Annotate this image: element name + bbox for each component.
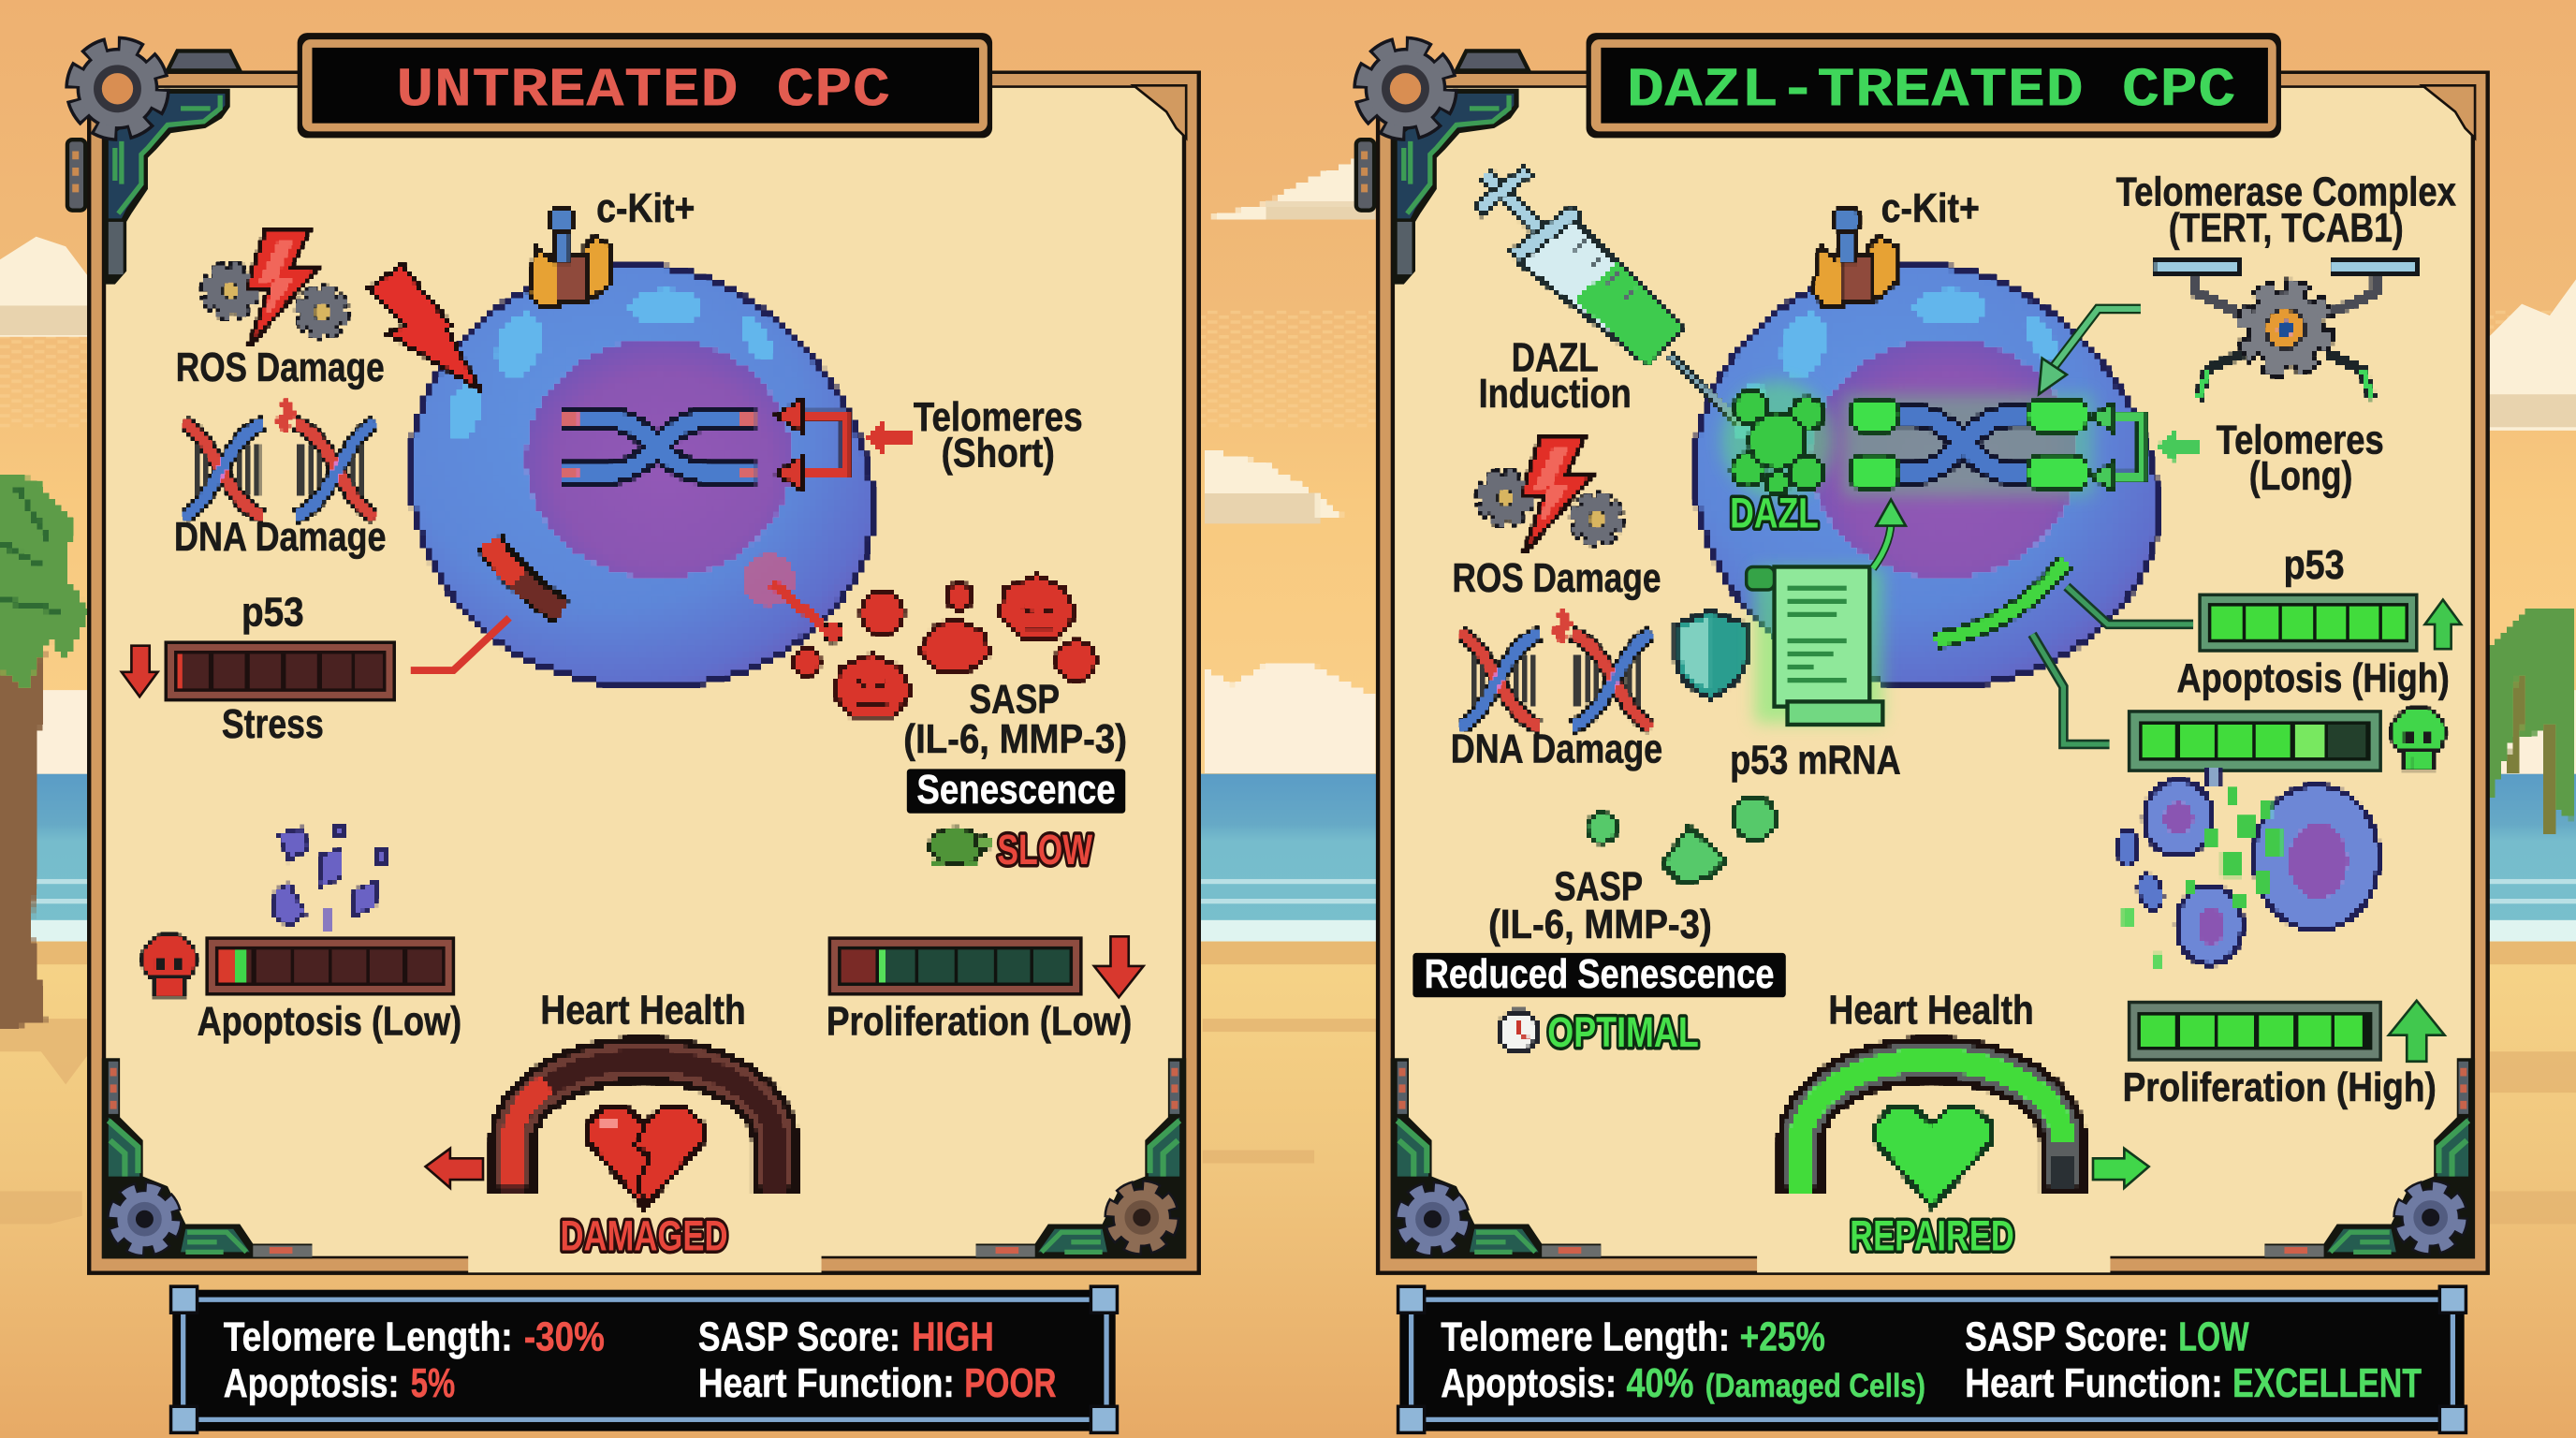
right palm — [2489, 608, 2576, 835]
label: DAZL Induction — [1479, 335, 1632, 417]
label: Telomerase Complex: Telomerase Complex — [2116, 169, 2456, 214]
label: c-Kit+: c-Kit+ — [1881, 185, 1980, 231]
label: DAMAGED: DAMAGED — [560, 1212, 728, 1260]
label: SASP (IL-6, MMP-3): (IL-6, MMP-3) — [903, 716, 1127, 762]
gauge: repaired — [1801, 1060, 2063, 1193]
mid clouds — [1203, 157, 1377, 774]
green telomere bracket arrows — [2089, 403, 2202, 492]
label: SLOW: SLOW — [997, 826, 1093, 873]
label: ROS Damage: ROS Damage — [1453, 555, 1661, 601]
icon: broken heart — [588, 1106, 703, 1208]
label: Telomeres (Long): (Long) — [2249, 453, 2352, 499]
right cloud — [2489, 279, 2576, 431]
title text: DAZL-TREATED CPC — [1627, 58, 2236, 122]
label: Proliferation (High): Proliferation (High) — [2123, 1064, 2437, 1110]
label: c-Kit+: c-Kit+ — [596, 185, 695, 231]
label: SASP (IL-6, MMP-3): SASP — [970, 677, 1060, 723]
icon: damaged DNA — [184, 401, 374, 516]
icon: syringe — [1473, 166, 1741, 424]
gauge: damaged — [513, 1060, 775, 1193]
label: Apoptosis (High): Apoptosis (High) — [2177, 655, 2450, 701]
corner gear: bottom right — [2401, 1188, 2460, 1247]
label: SASP (IL-6, MMP-3) — [1488, 864, 1712, 947]
badge: Senescence: Senescence — [916, 767, 1116, 813]
cell — [1695, 266, 2158, 687]
label: Telomeres (Short): (Short) — [942, 430, 1055, 476]
bar: proliferation low — [828, 936, 1083, 996]
stat: SASP score: HIGH — [912, 1314, 994, 1360]
icon: green heart — [1876, 1106, 1991, 1208]
label: DAZL: DAZL — [1730, 489, 1819, 536]
arrow: proliferation down — [1094, 936, 1144, 997]
icon: green skull — [2392, 708, 2445, 769]
stat: apoptosis: (Damaged Cells) — [1705, 1368, 1925, 1404]
p53 marker in cell — [490, 542, 562, 611]
label: SASP (IL-6, MMP-3): (IL-6, MMP-3) — [1488, 902, 1712, 947]
label: OPTIMAL: OPTIMAL — [1547, 1008, 1699, 1056]
title plate — [298, 33, 992, 138]
label: REPAIRED: REPAIRED — [1850, 1212, 2014, 1260]
icon: DAZL protein — [1721, 381, 1834, 500]
stat: apoptosis: Apoptosis: — [1441, 1360, 1617, 1406]
label: p53 mRNA: p53 mRNA — [1730, 738, 1901, 784]
arrow: p53 down — [122, 646, 157, 697]
arrow: telomerase to telomere — [2039, 309, 2141, 394]
corner gear: top left — [77, 48, 158, 130]
stat: heart function — [1965, 1360, 2422, 1406]
stat: telomere length: +25% — [1740, 1314, 1825, 1360]
c-Kit receptor — [1814, 207, 1895, 305]
bar: apoptosis high — [2128, 710, 2382, 772]
arrow: p53 up — [2425, 600, 2461, 649]
arrow: mRNA to nucleus — [1873, 500, 1906, 568]
connectors: bars to cell — [2032, 587, 2193, 744]
c-Kit receptor — [529, 207, 611, 305]
panel: DAZL-treated summary — [1398, 1286, 2466, 1432]
label: p53: p53 — [242, 590, 304, 636]
stat: apoptosis: Apoptosis: — [224, 1360, 399, 1406]
label: Telomerase Complex — [2116, 169, 2456, 251]
icon: shield — [1676, 611, 1747, 698]
bar: apoptosis low — [205, 936, 455, 996]
stat: SASP score: SASP Score: — [698, 1314, 900, 1360]
label: DNA Damage: DNA Damage — [174, 514, 386, 560]
corner gear: bottom right — [1112, 1188, 1171, 1247]
corner gear: bottom left — [115, 1190, 174, 1249]
icon: big lightning bolt — [368, 265, 479, 389]
icon: apoptotic fragments — [272, 827, 386, 933]
SASP secretion — [742, 553, 1096, 716]
label: ROS Damage: ROS Damage — [176, 345, 385, 390]
cell — [410, 266, 872, 687]
panel frame — [1356, 51, 2490, 1275]
label: SASP (IL-6, MMP-3): SASP — [1554, 864, 1643, 910]
label: Telomeres (Short): Telomeres — [914, 394, 1083, 440]
stat: heart function: EXCELLENT — [2232, 1360, 2422, 1406]
label: Telomeres (Long) — [2217, 417, 2384, 499]
badge: Reduced Senescence: Reduced Senescence — [1425, 951, 1775, 997]
chromosome with short telomeres — [562, 419, 755, 473]
bar: p53 stress — [165, 640, 396, 701]
label: Apoptosis (Low): Apoptosis (Low) — [198, 999, 461, 1045]
icon: red skull — [143, 935, 196, 996]
icon: ROS damage gears and bolt — [1482, 437, 1618, 552]
panel frame — [67, 51, 1201, 1275]
left palm — [0, 473, 91, 1029]
connector: p53 to cell — [411, 618, 509, 670]
corner gear: top left — [1365, 48, 1446, 130]
stat: telomere length: Telomere Length: — [224, 1314, 513, 1360]
left cloud — [0, 237, 91, 337]
p53 marker in cell — [1936, 562, 2065, 640]
label: DAZL Induction: Induction — [1479, 371, 1632, 417]
icon: p53 mRNA scroll — [1747, 566, 1882, 725]
stat: heart function: Heart Function: — [1965, 1360, 2223, 1406]
panel: DAZL-treated CPC — [1356, 33, 2490, 1275]
label: Telomerase Complex: (TERT, TCAB1) — [2169, 205, 2404, 251]
icon: dying cells and healthy cell — [2117, 768, 2378, 968]
icon: damaged DNA — [1460, 611, 1651, 726]
corner gear: bottom left — [1403, 1190, 1462, 1249]
arrow: gauge right — [2093, 1149, 2149, 1188]
bar: p53 high — [2198, 594, 2419, 653]
label: SASP (IL-6, MMP-3) — [903, 677, 1127, 762]
title plate — [1587, 33, 2281, 138]
stat: telomere length: -30% — [524, 1314, 605, 1360]
stat: telomere length: Telomere Length: — [1441, 1314, 1730, 1360]
label: Heart Health: Heart Health — [540, 987, 746, 1033]
title text: UNTREATED CPC — [396, 58, 890, 122]
label: Heart Health: Heart Health — [1828, 987, 2034, 1033]
chromosome with long telomeres — [1843, 394, 2093, 496]
red telomere bracket arrows — [775, 399, 912, 490]
icon: turtle — [929, 829, 992, 868]
stat: heart function: Heart Function: — [698, 1360, 955, 1406]
label: Telomeres (Long): Telomeres — [2217, 417, 2384, 462]
bar: proliferation high — [2128, 1001, 2382, 1062]
label: Proliferation (Low): Proliferation (Low) — [827, 999, 1132, 1045]
label: DAZL Induction: DAZL — [1512, 335, 1599, 381]
stat: apoptosis: 40% — [1627, 1360, 1694, 1406]
label: DNA Damage: DNA Damage — [1451, 726, 1662, 771]
label: Telomeres (Short) — [914, 394, 1083, 476]
icon: ROS damage gears and bolt — [207, 230, 344, 345]
icon: stopwatch — [1499, 1009, 1538, 1051]
label: Stress: Stress — [222, 701, 324, 747]
stat: heart function: POOR — [964, 1360, 1057, 1406]
panel: untreated summary — [171, 1286, 1117, 1432]
stat: apoptosis — [1441, 1360, 1925, 1406]
stat: SASP score: SASP Score: — [1965, 1314, 2169, 1360]
icon: telomerase drone — [2154, 259, 2419, 399]
panel: untreated CPC — [67, 33, 1201, 1275]
stat: apoptosis: 5% — [411, 1360, 455, 1406]
label: p53: p53 — [2284, 542, 2345, 588]
arrow: proliferation up — [2389, 1001, 2445, 1062]
stat: SASP score: LOW — [2178, 1314, 2249, 1360]
arrow: gauge left — [426, 1149, 483, 1188]
SASP reduced blobs — [1587, 797, 1776, 884]
